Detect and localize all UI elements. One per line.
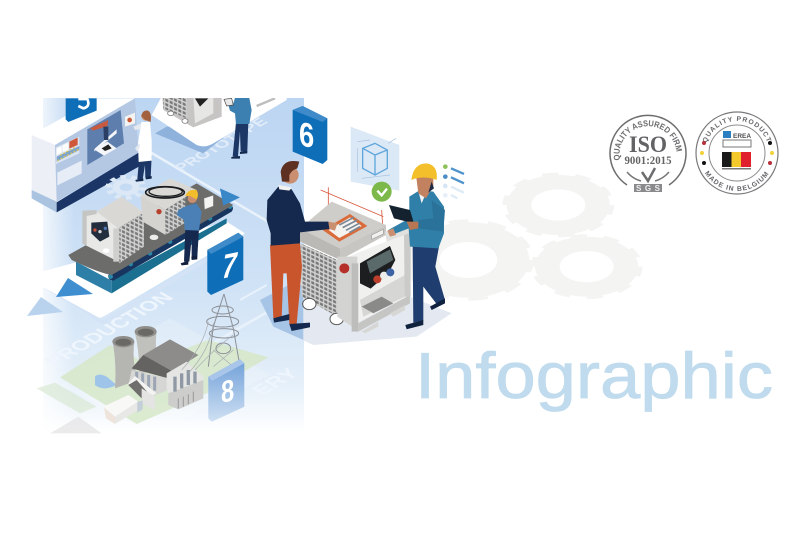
small box on belt: [204, 195, 213, 209]
inspection machine: [300, 202, 411, 333]
grill side: [301, 243, 337, 317]
checklist icon: [443, 164, 464, 198]
conveyor station 7: [42, 178, 245, 325]
control panel: [56, 137, 79, 164]
station 6 platform and machine at top: [152, 97, 287, 159]
emergency stop: [339, 263, 349, 273]
arrow: production pale: [27, 297, 63, 316]
badge: number 5: [66, 98, 97, 122]
gear on floor: [109, 177, 143, 198]
seal: ISO 9001:2015: SGS: [636, 184, 661, 193]
machine chamber: [87, 110, 124, 165]
title: Infographic: [415, 339, 773, 412]
badge: number 8: [208, 359, 244, 422]
main plant hall: [128, 339, 198, 410]
white machine top: [43, 98, 135, 145]
panel: blue production background: [43, 98, 304, 433]
seal: ISO 9001:2015: [609, 114, 687, 193]
label: prototype: PROTOTYPE: [171, 115, 272, 174]
main scene: inspection: [240, 106, 464, 345]
check mark: [372, 182, 392, 202]
machine front: [55, 98, 139, 202]
electric panel: [360, 246, 395, 289]
floor shadow: [260, 282, 452, 345]
top and collar: [300, 202, 386, 248]
machine station 5: [32, 98, 152, 212]
person with tablet: [224, 98, 252, 159]
arrow: production blue: [56, 278, 93, 297]
badge: number 7: 7: [219, 244, 241, 287]
seal: quality product made in Belgium: EREA: [733, 133, 751, 140]
electricity pylon: [182, 294, 240, 373]
grey building fading out: [50, 417, 102, 433]
green site: [60, 340, 268, 424]
shadow under platform: [155, 127, 233, 153]
badge: number 7: [207, 233, 243, 295]
delivery truck: [103, 395, 143, 424]
blueprint panel: [351, 127, 399, 191]
frame: [337, 257, 357, 330]
power plant station 8: [37, 294, 268, 433]
seal: ISO 9001:2015: ISO: [629, 132, 667, 157]
right machine with cable: [141, 178, 197, 235]
red inspection lines: [321, 187, 383, 226]
gear: left: [409, 223, 528, 297]
badge: number 6: 6: [299, 114, 314, 156]
seal: ISO 9001:2015: QUALITY ASSURED FIRM: [614, 120, 682, 160]
substation: [167, 362, 203, 409]
decorative gears: [409, 176, 637, 297]
worker with tablet: [387, 163, 445, 329]
cooling towers: [112, 326, 160, 388]
conveyor body: [68, 183, 233, 293]
arrow: belt direction: [220, 188, 240, 206]
left machine: [82, 197, 144, 263]
seal: ISO 9001:2015: 9001:2015: [624, 155, 672, 167]
lower screen: [57, 161, 82, 185]
white platform: [42, 222, 245, 318]
machine interior: [338, 233, 407, 323]
red button plate: [125, 113, 135, 127]
label: delivery: ERY: [247, 365, 304, 399]
seal: quality product made in Belgium: QUALITY PRODUCT: [702, 116, 772, 142]
road edge line: [240, 285, 267, 300]
label: production: PRODUCTION: [40, 289, 179, 370]
wheels: [303, 298, 316, 310]
clipboard: [323, 214, 367, 242]
white platform: [152, 97, 287, 146]
seal: quality product made in Belgium: MADE IN BELGIUM: [705, 170, 768, 192]
person in lab coat: [133, 110, 152, 182]
badge: number 6: [293, 106, 327, 164]
pale water: [95, 375, 117, 388]
gear: upper: [508, 176, 608, 234]
seal: quality product made in Belgium: [695, 111, 779, 195]
gear: right: [537, 238, 637, 296]
badge: number 8: 8: [221, 372, 234, 410]
man in navy sweater: [267, 161, 337, 331]
prototype machine: [162, 97, 222, 127]
machine side: [32, 135, 57, 203]
worker at conveyor: [177, 190, 202, 265]
rail on platform: [257, 98, 275, 106]
road labels: [40, 115, 304, 399]
